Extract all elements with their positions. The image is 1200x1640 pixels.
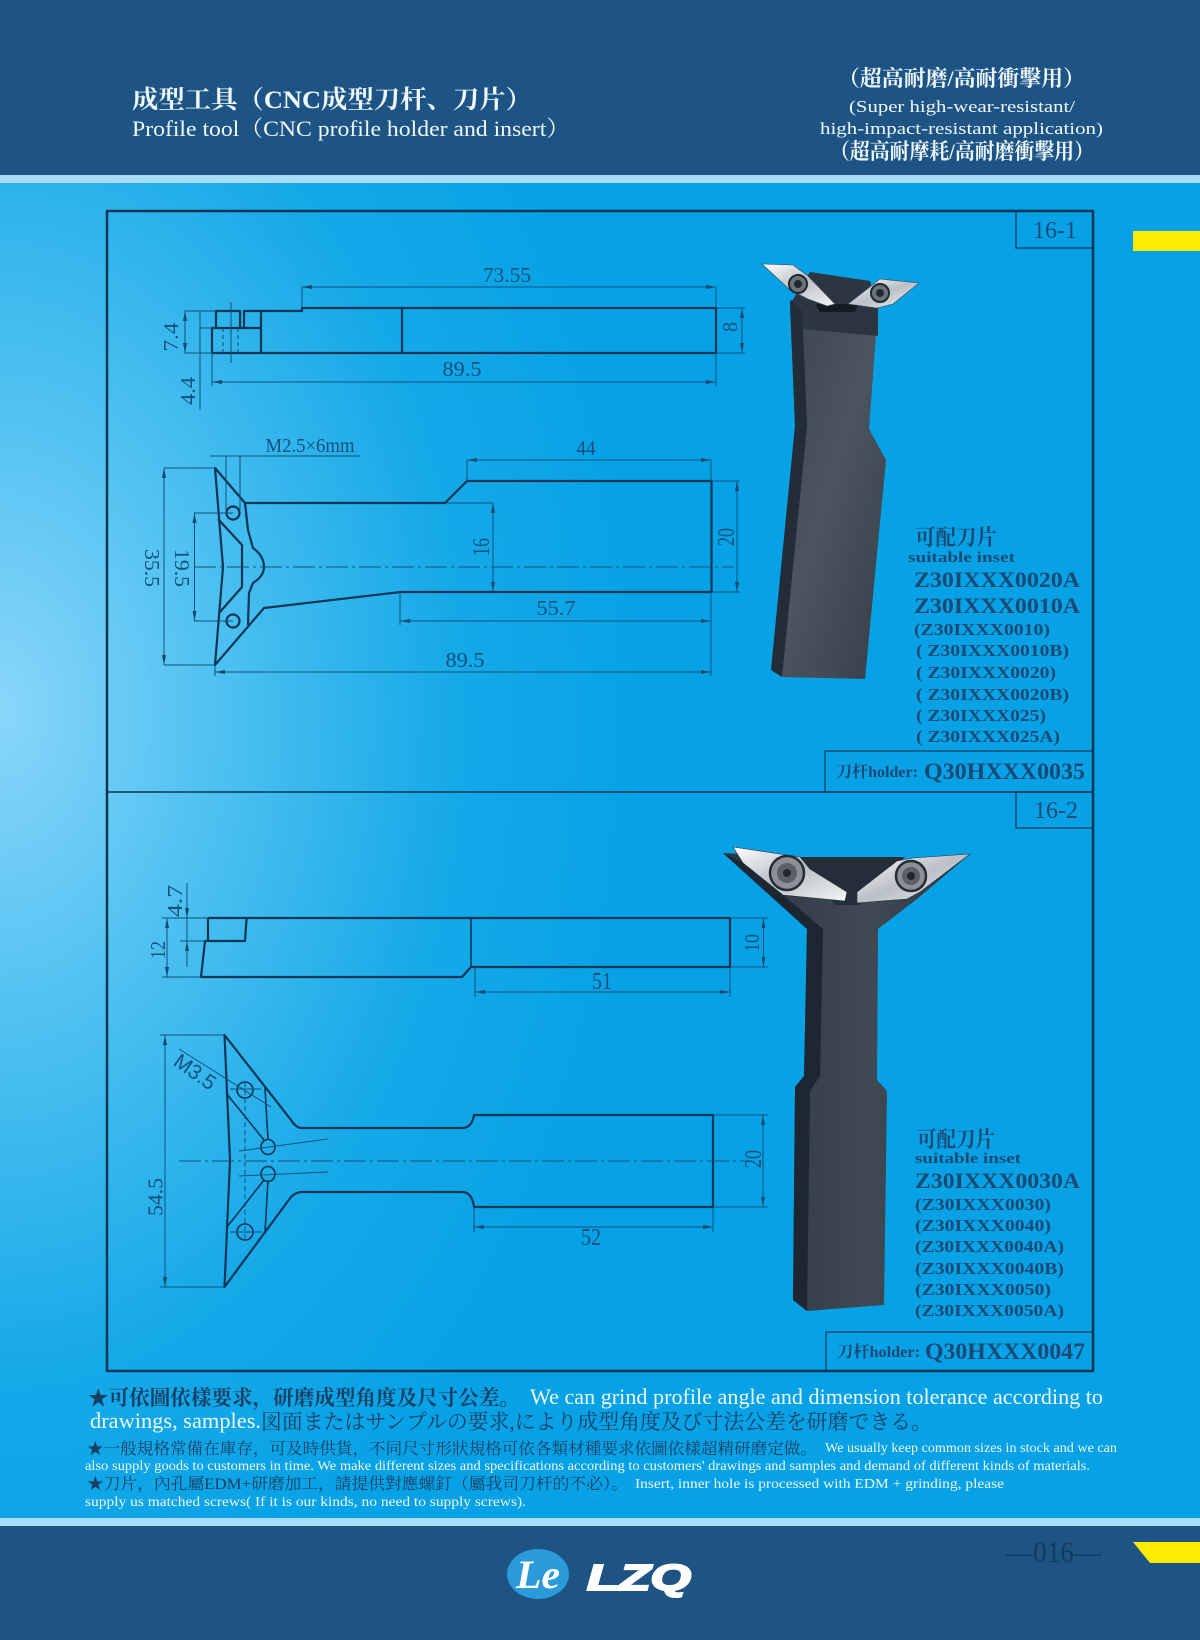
- plan view drawing 16-1: [140, 435, 740, 676]
- holder code 16-1: [825, 751, 1093, 792]
- holder code 16-1: Q30HXXX0035: [924, 759, 1085, 784]
- note 1: ★可依圖依樣要求，研磨成型角度及尺寸公差。: [88, 1386, 520, 1411]
- dimension 20: 20: [714, 528, 740, 546]
- note 1: [88, 1384, 1103, 1434]
- yellow corner tab: [1133, 1542, 1200, 1563]
- side view drawing 16-1: [159, 263, 745, 410]
- dimension 73.55: 73.55: [483, 263, 531, 287]
- dimension 89.5: 89.5: [442, 357, 482, 381]
- suitable inserts list 16-1: (Z30IXXX0010): [914, 620, 1050, 639]
- dimension 10: 10: [740, 934, 764, 952]
- dimension M3.5: M3.5: [169, 1050, 220, 1095]
- note 2: We usually keep common sizes in stock and we can: [825, 1441, 1117, 1456]
- suitable inserts list 16-2: suitable inset: [915, 1151, 1021, 1167]
- header band: [0, 0, 1200, 183]
- suitable inserts list 16-1: 可配刀片: [915, 525, 997, 550]
- label 16-1: [1016, 211, 1093, 248]
- note 3: Insert, inner hole is processed with EDM + grinding, please: [635, 1477, 1004, 1492]
- suitable inserts list 16-1: ( Z30IXXX025A): [916, 727, 1060, 746]
- suitable inserts list 16-2: (Z30IXXX0030): [915, 1195, 1051, 1214]
- suitable inserts list 16-1: ( Z30IXXX0010B): [916, 641, 1069, 660]
- dimension 44: 44: [576, 436, 596, 460]
- note 3: ★刀片，內孔屬EDM+研磨加工，請提供對應螺釘（屬我司刀杆的不必）。: [87, 1474, 628, 1493]
- logo: LZQ: LZQ: [587, 1557, 691, 1598]
- side view drawing 16-2: [146, 883, 768, 997]
- dimension 7.4: 7.4: [159, 322, 183, 352]
- suitable inserts list 16-1: Z30IXXX0020A: [914, 567, 1080, 592]
- suitable inserts list 16-1: ( Z30IXXX0020): [916, 663, 1056, 682]
- note 2: ★一般規格常備在庫存，可及時供貨，不同尺寸形狀規格可依各類材種要求依圖依樣超精研磨定做。: [87, 1439, 817, 1458]
- label 16-2: 16-2: [1034, 798, 1078, 824]
- application note: （超高耐摩耗/高耐磨衝擊用）: [830, 139, 1094, 164]
- suitable inserts list 16-2: (Z30IXXX0040A): [915, 1237, 1064, 1256]
- dimension 12: 12: [146, 941, 170, 959]
- suitable inserts list 16-1: ( Z30IXXX025): [916, 706, 1046, 725]
- yellow side tab: [1133, 231, 1200, 251]
- dimension 54.5: 54.5: [144, 1178, 168, 1216]
- dimension 89.5: 89.5: [446, 648, 484, 672]
- dimension 4.4: 4.4: [176, 376, 200, 405]
- photo: tool holder 16-2: [723, 847, 970, 1311]
- application note: （超高耐磨/高耐衝擊用）: [838, 66, 1085, 91]
- title: Chinese: 成型工具（CNC成型刀杆、刀片）: [132, 86, 532, 114]
- holder code 16-2: Q30HXXX0047: [925, 1339, 1085, 1364]
- dimension M2.5x6mm: M2.5×6mm: [266, 435, 355, 457]
- note 3: [85, 1474, 1004, 1510]
- suitable inserts list 16-2: (Z30IXXX0050A): [915, 1301, 1064, 1320]
- suitable inserts list 16-2: [915, 1127, 1080, 1320]
- dimension 51: 51: [592, 969, 612, 995]
- dimension 55.7: 55.7: [536, 596, 576, 620]
- holder code 16-1: 刀杆holder:: [836, 762, 918, 781]
- logo: LZQ: [507, 1549, 691, 1599]
- note 2: also supply goods to customers in time. We make different sizes and specifications according to customers' drawings and samples and demand of different kinds of materials.: [85, 1459, 1090, 1474]
- panel: 16-1: [140, 211, 1093, 792]
- catalog frame: [107, 211, 1093, 1371]
- suitable inserts list 16-2: (Z30IXXX0040B): [915, 1259, 1064, 1278]
- dimension 20: 20: [741, 1150, 767, 1168]
- suitable inserts list 16-1: suitable inset: [908, 550, 1015, 566]
- suitable inserts list 16-1: [908, 525, 1080, 746]
- suitable inserts list 16-2: (Z30IXXX0040): [915, 1216, 1051, 1235]
- suitable inserts list 16-1: ( Z30IXXX0020B): [916, 685, 1069, 704]
- footnotes: [85, 1384, 1117, 1510]
- dimension 52: 52: [581, 1225, 601, 1251]
- dimension 4.7: 4.7: [163, 885, 187, 917]
- note 1: drawings, samples.: [90, 1408, 261, 1433]
- holder code 16-2: 刀杆holder:: [837, 1342, 920, 1361]
- suitable inserts list 16-2: 可配刀片: [917, 1127, 995, 1152]
- note 1: 図面またはサンプルの要求,により成型角度及び寸法公差を研磨できる。: [261, 1410, 932, 1434]
- application note: high-impact-resistant application): [820, 119, 1103, 138]
- logo: LZQ: Le: [515, 1552, 560, 1597]
- dimension 19.5: 19.5: [170, 549, 194, 587]
- suitable inserts list 16-2: Z30IXXX0030A: [915, 1168, 1080, 1193]
- suitable inserts list 16-2: (Z30IXXX0050): [915, 1280, 1051, 1299]
- plan view drawing 16-2: [144, 1035, 768, 1287]
- application note: [820, 66, 1103, 164]
- application note: (Super high-wear-resistant/: [849, 97, 1075, 116]
- note 1: We can grind profile angle and dimension tolerance according to: [530, 1384, 1103, 1409]
- note 2: [85, 1439, 1117, 1474]
- page number: —016—: [1005, 1536, 1102, 1569]
- dimension 8: 8: [718, 322, 742, 332]
- panel: 16-2: [144, 792, 1093, 1371]
- title: English: Profile tool（CNC profile holder and insert）: [132, 116, 570, 141]
- label 16-2: [1016, 792, 1093, 828]
- note 3: supply us matched screws( If it is our kinds, no need to supply screws).: [85, 1495, 526, 1510]
- holder code 16-2: [826, 1332, 1093, 1371]
- photo: tool holder 16-1: [762, 264, 919, 679]
- label 16-1: 16-1: [1033, 218, 1077, 244]
- suitable inserts list 16-1: Z30IXXX0010A: [914, 593, 1080, 618]
- footer band: [0, 1518, 1200, 1640]
- dimension 16: 16: [469, 538, 495, 556]
- dimension 35.5: 35.5: [140, 549, 164, 587]
